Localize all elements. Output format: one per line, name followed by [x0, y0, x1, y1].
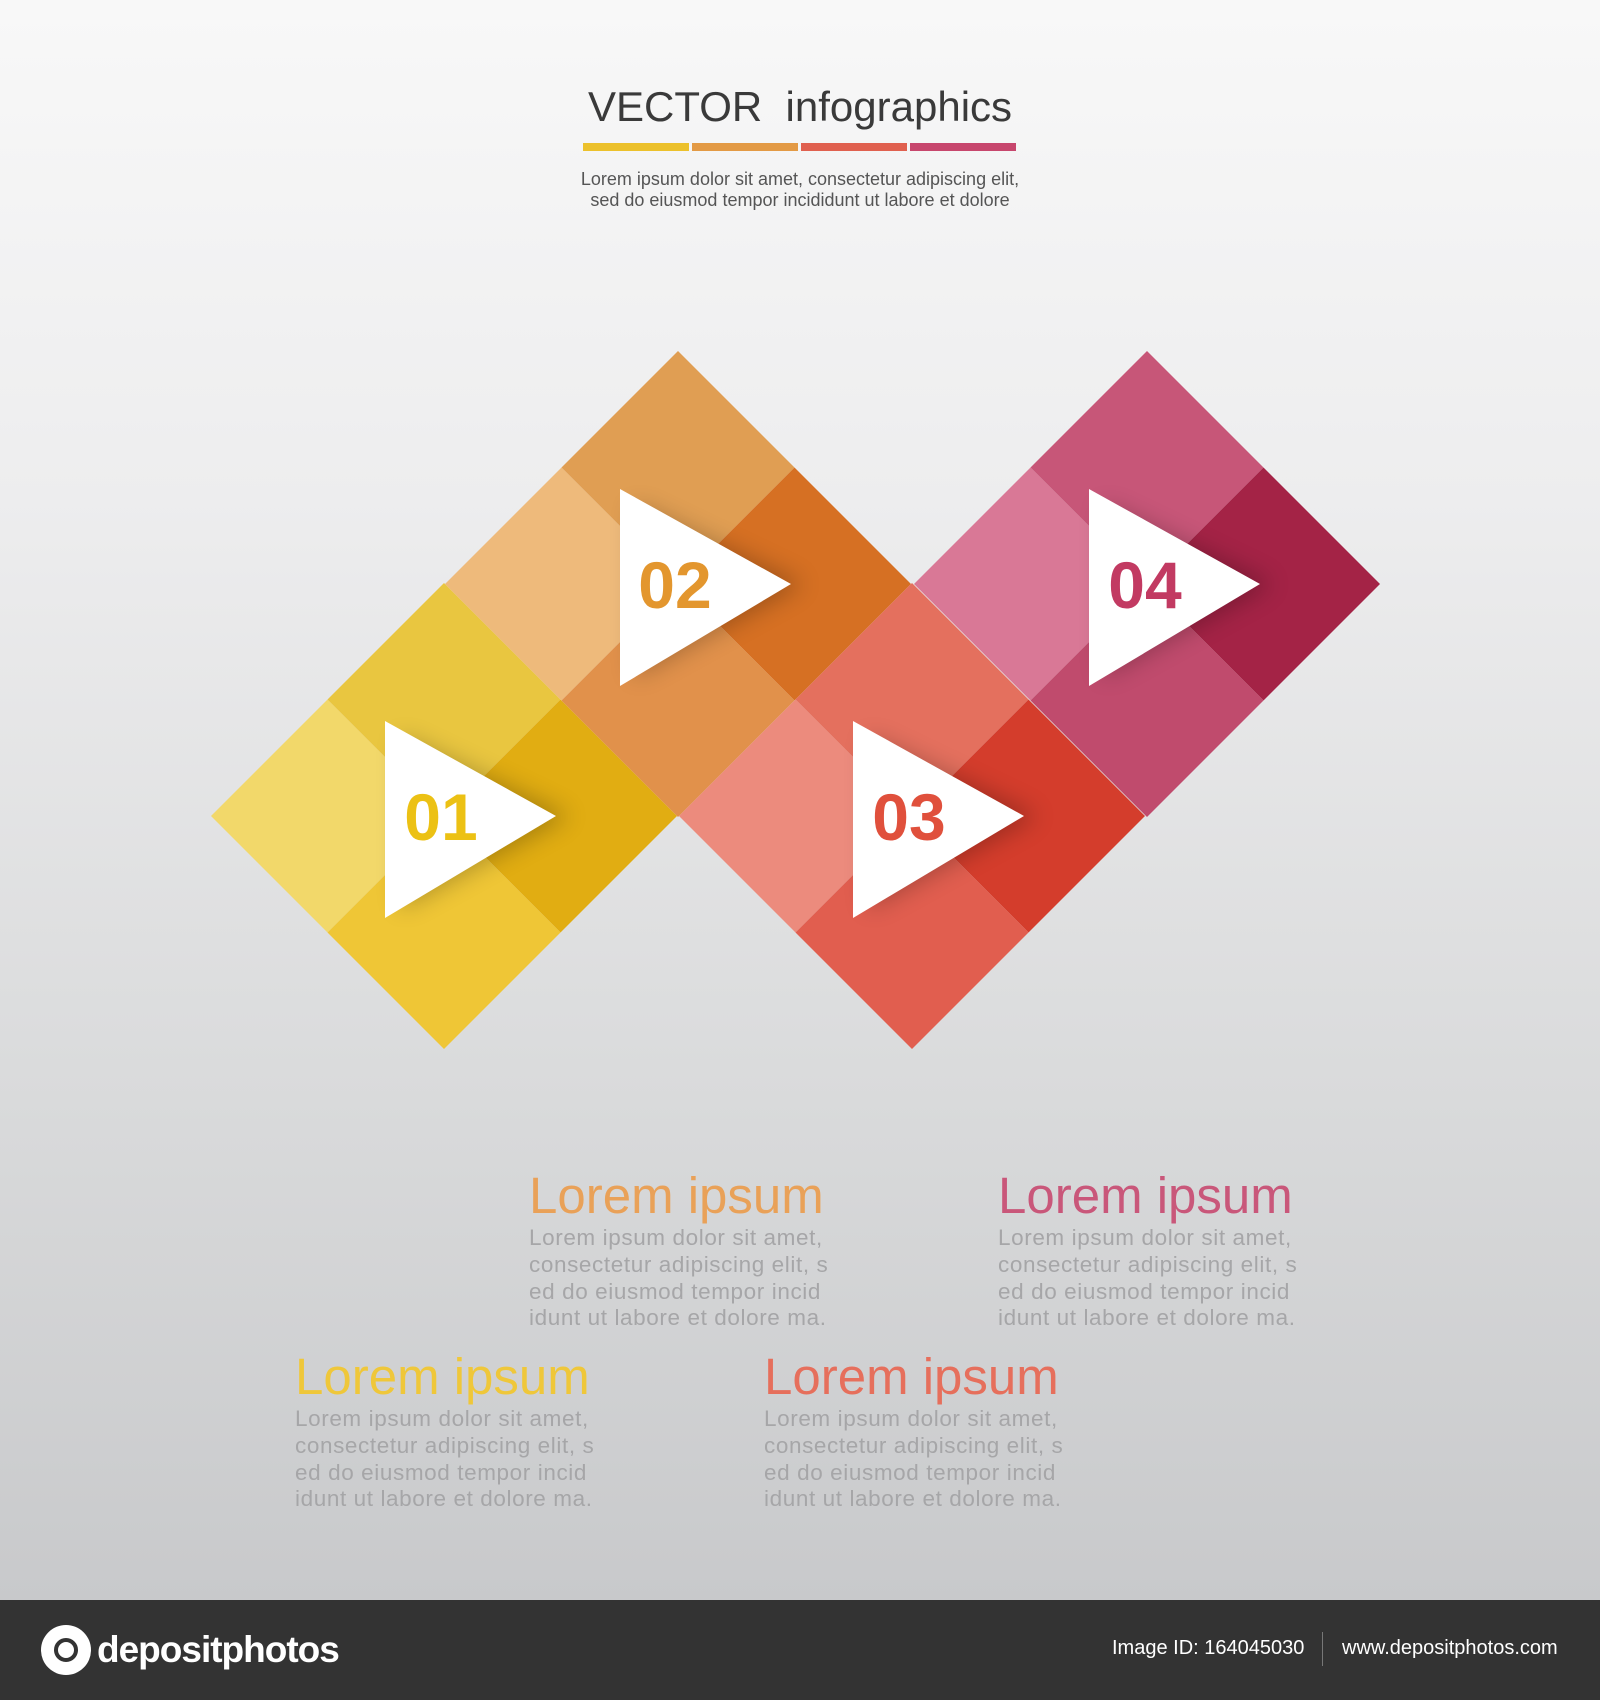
- diamond 01: [211, 583, 677, 1049]
- diamond 04: 04: [1108, 548, 1182, 622]
- subtitle: [581, 169, 1019, 210]
- text block 01: ed do eiusmod tempor incid: [295, 1460, 587, 1485]
- text block 04: [998, 1167, 1297, 1330]
- text block 03: Lorem ipsum: [764, 1348, 1059, 1405]
- footer logo: depositphotos: [97, 1629, 339, 1670]
- diamond 03: 03: [872, 780, 946, 854]
- text block 02: [529, 1167, 828, 1330]
- footer image id: Image ID: 164045030: [1112, 1637, 1304, 1659]
- color bar: [583, 143, 1016, 151]
- text block 04: Lorem ipsum: [998, 1167, 1293, 1224]
- diamond 02: 02: [638, 548, 712, 622]
- text block 01: Lorem ipsum: [295, 1348, 590, 1405]
- text block 03: Lorem ipsum dolor sit amet,: [764, 1406, 1058, 1431]
- text block 01: idunt ut labore et dolore ma.: [295, 1486, 593, 1511]
- text block 04: idunt ut labore et dolore ma.: [998, 1305, 1296, 1330]
- diamond 02: [445, 351, 911, 817]
- subtitle: sed do eiusmod tempor incididunt ut labore et dolore: [590, 190, 1010, 210]
- diamond 04: [914, 351, 1380, 817]
- text block 02: consectetur adipiscing elit, s: [529, 1252, 828, 1277]
- text block 01: [295, 1348, 594, 1511]
- text block 03: idunt ut labore et dolore ma.: [764, 1486, 1062, 1511]
- text block 03: consectetur adipiscing elit, s: [764, 1433, 1063, 1458]
- text block 04: Lorem ipsum dolor sit amet,: [998, 1225, 1292, 1250]
- title: VECTOR infographics: [588, 83, 1012, 130]
- text block 02: idunt ut labore et dolore ma.: [529, 1305, 827, 1330]
- text block 04: consectetur adipiscing elit, s: [998, 1252, 1297, 1277]
- text block 03: [764, 1348, 1063, 1511]
- footer url: www.depositphotos.com: [1342, 1637, 1558, 1659]
- diamond chart: [211, 351, 1380, 1049]
- text block 02: Lorem ipsum: [529, 1167, 824, 1224]
- text block 04: ed do eiusmod tempor incid: [998, 1279, 1290, 1304]
- icon: camera: [41, 1625, 91, 1675]
- text block 01: Lorem ipsum dolor sit amet,: [295, 1406, 589, 1431]
- text block 02: Lorem ipsum dolor sit amet,: [529, 1225, 823, 1250]
- diamond 03: [679, 583, 1145, 1049]
- text block 01: consectetur adipiscing elit, s: [295, 1433, 594, 1458]
- diamond 01: 01: [404, 780, 478, 854]
- text block 03: ed do eiusmod tempor incid: [764, 1460, 1056, 1485]
- footer: [0, 1600, 1600, 1700]
- subtitle: Lorem ipsum dolor sit amet, consectetur adipiscing elit,: [581, 169, 1019, 189]
- text block 02: ed do eiusmod tempor incid: [529, 1279, 821, 1304]
- footer logo: [41, 1625, 339, 1675]
